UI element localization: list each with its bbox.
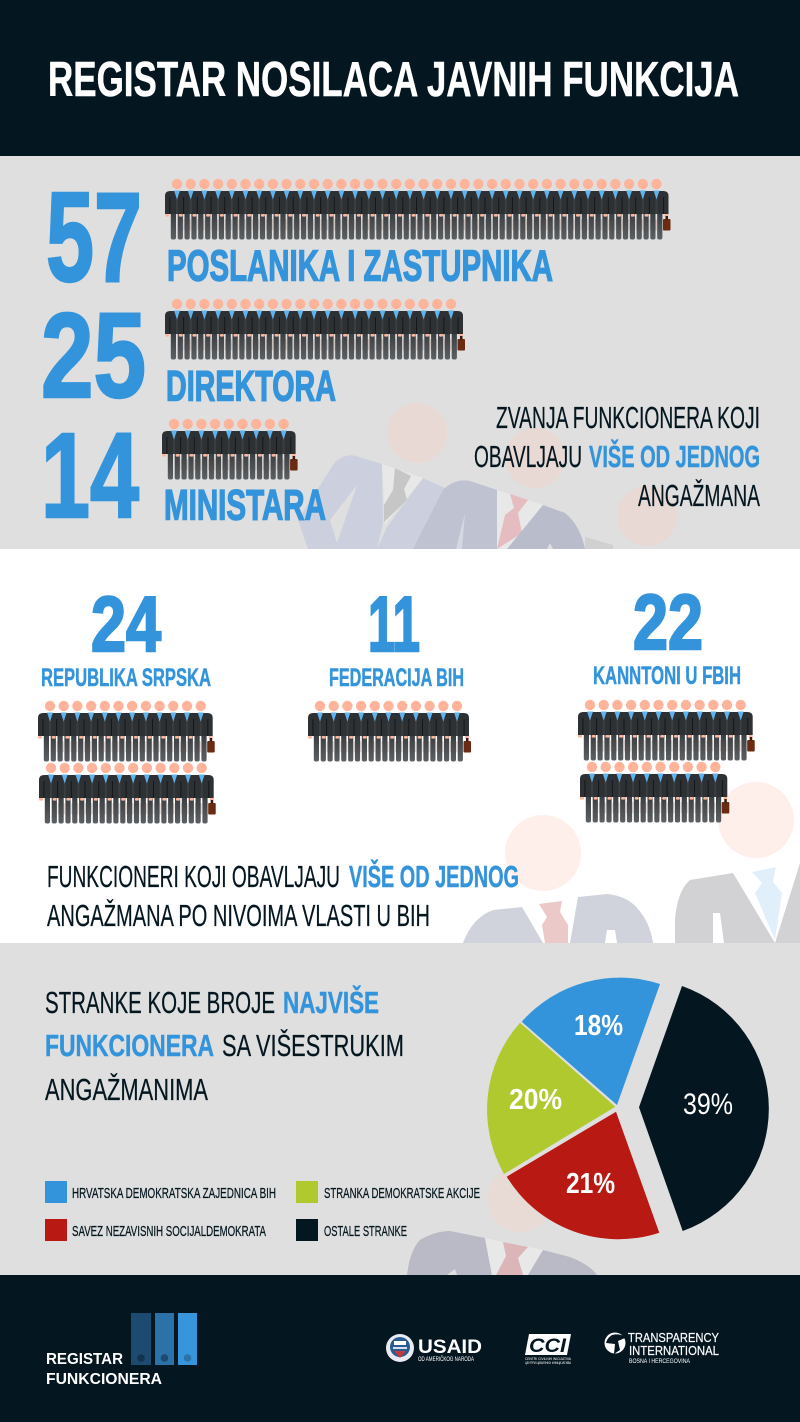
text block: funkcioneri	[47, 858, 519, 933]
logo: cci: ЦЕНТРИ ЦИВИЛНИХ ИНИЦИЈАТИВА	[525, 1360, 571, 1365]
legend: STRANKA DEMOKRATSKE AKCIJE	[324, 1185, 480, 1202]
column: republika srpska	[38, 580, 216, 824]
column: kantoni u fbih	[578, 578, 755, 822]
legend: SAVEZ NEZAVISNIH SOCIJALDEMOKRATA	[72, 1223, 266, 1240]
logo: transparency international	[604, 1330, 719, 1365]
column: kantoni u fbih: 22	[633, 578, 703, 666]
legend: HRVATSKA DEMOKRATSKA ZAJEDNICA BIH	[72, 1185, 276, 1202]
pie chart	[487, 978, 769, 1239]
decorative faded suit	[407, 1166, 597, 1275]
pie chart: 21%	[566, 1168, 615, 1200]
pie chart: 39%	[683, 1088, 733, 1121]
stat: 25 direktora	[41, 287, 465, 423]
logo: registar funkcionera: REGISTAR	[46, 1351, 123, 1368]
pictogram row: 21 figures	[165, 299, 465, 360]
panel: stranke	[45, 978, 769, 1275]
logo: transparency international: BOSNA I HERCEGOVINA	[629, 1359, 690, 1365]
text block: funkcioneri: ANGAŽMANA PO NIVOIMA VLASTI U BIH	[47, 898, 430, 933]
logo: usaid: OD AMERIČKOG NARODA	[418, 1356, 474, 1363]
stat: 25 direktora: 25	[41, 287, 146, 423]
column: federacija bih: FEDERACIJA BIH	[329, 664, 464, 692]
pie chart: 18%	[574, 1010, 623, 1042]
panel: footer	[0, 1275, 800, 1422]
text block: stranke heading: SA VIŠESTRUKIM	[222, 1028, 404, 1063]
stat: 57 poslanika: 57	[46, 166, 142, 308]
column: federacija bih	[308, 580, 471, 762]
decorative faded suits	[463, 782, 800, 943]
pictogram rows	[578, 700, 755, 822]
stat: 14 ministara: MINISTARA	[164, 482, 326, 530]
legend	[45, 1181, 480, 1241]
text block: zvanja: OBAVLJAJU	[474, 439, 582, 474]
logo: usaid: USAID	[418, 1337, 482, 1358]
logo: cci: CCI	[529, 1336, 567, 1357]
text block: funkcioneri: FUNKCIONERI KOJI OBAVLJAJU	[47, 859, 340, 894]
stat: 57 poslanika: POSLANIKA I ZASTUPNIKA	[167, 242, 553, 290]
text block: stranke heading: NAJVIŠE	[283, 984, 379, 1020]
decorative faded suits	[298, 403, 677, 549]
column: republika srpska: 24	[91, 580, 161, 668]
panel: nivoi vlasti	[0, 549, 800, 943]
pictogram row: 9 figures	[162, 419, 298, 480]
pictogram row	[308, 701, 471, 762]
column: federacija bih: 11	[368, 580, 420, 668]
stat: 25 direktora: DIREKTORA	[166, 362, 336, 410]
logo: cci: CENTRI CIVILNIH INICIJATIVA	[525, 1356, 571, 1361]
logo: registar funkcionera	[46, 1313, 197, 1388]
pictogram rows	[38, 701, 216, 824]
panel: zvanja funkcionera	[43, 178, 760, 549]
text block: stranke heading	[45, 984, 404, 1107]
text block: stranke heading: STRANKE KOJE BROJE	[45, 985, 275, 1020]
logo: transparency international: INTERNATIONAL	[629, 1343, 719, 1358]
logo: usaid	[386, 1334, 482, 1363]
stat: 14 ministara: 14	[41, 407, 139, 543]
stat: 14 ministara	[41, 407, 326, 543]
logo: cci	[525, 1334, 571, 1365]
pie chart: 20%	[509, 1084, 562, 1116]
stat: 57 poslanika	[46, 166, 670, 308]
logo: registar funkcionera: FUNKCIONERA	[46, 1371, 162, 1388]
header band	[0, 0, 800, 156]
text block: zvanja	[474, 400, 760, 513]
text block: funkcioneri: VIŠE OD JEDNOG	[349, 858, 519, 894]
text block: stranke heading: FUNKCIONERA	[45, 1028, 214, 1063]
legend: OSTALE STRANKE	[324, 1223, 407, 1240]
column: republika srpska: REPUBLIKA SRPSKA	[41, 664, 211, 692]
text block: stranke heading: ANGAŽMANIMA	[45, 1072, 208, 1107]
logo: transparency international: TRANSPARENCY	[628, 1330, 719, 1345]
pictogram row: 36 figures	[165, 179, 670, 240]
